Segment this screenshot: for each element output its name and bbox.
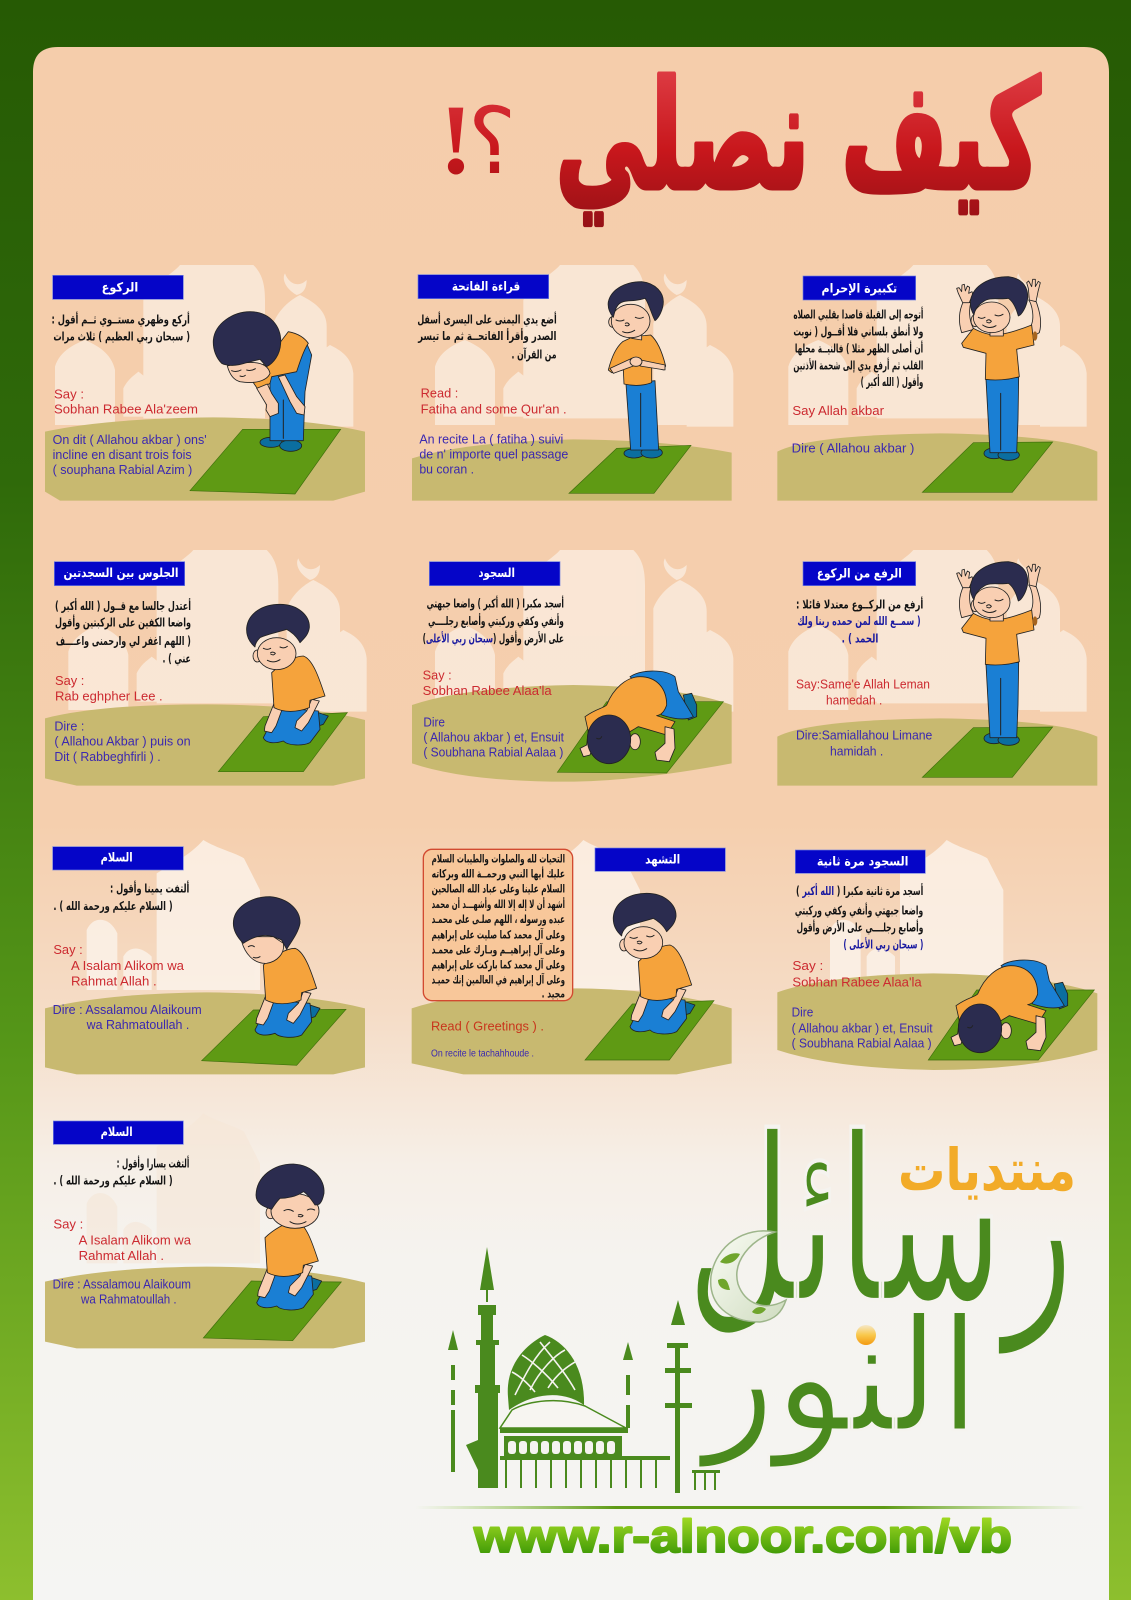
arabic text: ( سبحان ربي الأعلى ): [843, 936, 923, 951]
french instruction: Dire ( Allahou akbar ): [792, 441, 914, 455]
arabic text: واضعا جبهتي وأنفي وكفي وركبتي: [795, 902, 923, 918]
prayer rug: [557, 702, 723, 773]
callout: tashahhud text: عبده ورسوله ، اللهم صلـى على محمـد: [432, 912, 565, 926]
heading: [418, 275, 549, 299]
arabic text: ألتفت يسارا وأقول :: [117, 1155, 189, 1171]
heading: السجود: [478, 565, 515, 580]
heading: السلام: [101, 1124, 133, 1140]
french instruction: wa Rahmatoullah .: [80, 1292, 177, 1306]
background domes: [87, 1113, 260, 1263]
boy: sitting: [247, 604, 328, 745]
english instruction: Rahmat Allah .: [71, 975, 157, 989]
callout: tashahhud text: مجيد .: [542, 986, 565, 1000]
french instruction: [53, 433, 207, 477]
panel: second sujood: [777, 840, 1097, 1070]
heading: [803, 276, 916, 300]
english instruction: Sobhan Rabee Alaa'la: [423, 684, 553, 698]
logo wordmark: [686, 1089, 1076, 1468]
heading: السجود مرة ثانية: [817, 853, 908, 868]
english instruction: Read :: [421, 386, 458, 400]
arabic text: أسجد مكبرا ( الله أكبر ) واضعا جبهتي: [427, 596, 564, 612]
arabic text: على الأرض وأقول (سبحان ربي الأعلى): [423, 630, 564, 646]
background domes: [788, 265, 1087, 427]
arabic text: ( السلام عليكم ورحمة الله ) .: [53, 899, 173, 914]
french instruction: Dire: [423, 716, 445, 730]
heading: الجلوس بين السجدتين: [63, 565, 178, 580]
boy: prostrating: [580, 671, 697, 764]
french instruction: [53, 1277, 191, 1306]
english instruction: [55, 674, 163, 704]
heading: الرفع من الركوع: [817, 566, 902, 581]
callout: tashahhud text: وعلى آل إبراهيــم وبـارك على محمـد: [432, 942, 565, 956]
background domes: [467, 840, 640, 990]
prayer rug: [202, 1009, 346, 1065]
french instruction: Dire : Assalamou Alaikoum: [53, 1003, 202, 1017]
french instruction: [796, 728, 932, 758]
french instruction: Dire : Assalamou Alaikoum: [53, 1277, 191, 1291]
french instruction: On dit ( Allahou akbar ) ons': [53, 433, 207, 447]
french instruction: [419, 432, 568, 476]
english instruction: Sobhan Rabee Ala'zeem: [54, 403, 198, 417]
arabic text: [795, 883, 923, 951]
callout: tashahhud text: أشهد أن لا إله إلا الله وأشهـــد أن محمد: [432, 897, 565, 911]
prayer rug: [585, 1001, 714, 1060]
heading: [53, 1121, 183, 1144]
prayer rug: [190, 429, 341, 494]
arabic text: ( السلام عليكم ورحمة الله ) .: [53, 1174, 173, 1189]
background domes: [788, 550, 1087, 712]
french instruction: ( Allahou Akbar ) puis on: [54, 735, 191, 749]
arabic text: ( سمــع الله لمن حمده ربنا ولك: [797, 614, 921, 629]
icon: mosque: [448, 1247, 720, 1493]
ground: [412, 685, 732, 782]
english instruction: A Isalam Alikom wa: [71, 959, 185, 973]
icon: orange dot: [856, 1325, 876, 1345]
ground: [777, 718, 1097, 786]
arabic text: أضع يدي اليمنى على اليسرى أسفل: [417, 311, 557, 326]
website url: www.r-alnoor.com/vb: [473, 1510, 1012, 1562]
heading: [54, 562, 185, 586]
callout: tashahhud text: وعلى آل محمد كما صليت على إبراهيم: [432, 927, 565, 941]
arabic text: ألتفت يمينا وأقول :: [110, 881, 189, 897]
panel: sujood: [412, 550, 733, 782]
heading: قراءة الفاتحة: [452, 279, 520, 294]
french instruction: Dire: [792, 1006, 813, 1020]
french instruction: hamidah .: [830, 744, 883, 758]
logo wordmark: النور: [698, 1286, 980, 1468]
prayer rug: [218, 713, 347, 772]
arabic text: [417, 311, 557, 361]
arabic text: أركع وظهري مستــوي ثــم أقول :: [51, 311, 190, 327]
arabic text: [793, 306, 923, 390]
ground: [45, 704, 365, 786]
boy: sitting, head turned: [233, 897, 320, 1037]
english instruction: Say :: [54, 387, 84, 401]
english instruction: hamedah .: [826, 693, 882, 707]
french instruction: wa Rahmatoullah .: [86, 1018, 189, 1032]
heading: [595, 848, 725, 871]
french instruction: [792, 1006, 933, 1051]
arabic text: [53, 1155, 189, 1189]
french instruction: [54, 720, 191, 764]
french instruction: Dire:Samiallahou Limane: [796, 728, 932, 742]
background domes: [55, 265, 353, 427]
arabic text: [796, 596, 923, 645]
ground: [777, 973, 1097, 1070]
heading: [53, 847, 183, 870]
english instruction: Sobhan Rabee Alaa'la: [792, 976, 923, 990]
english instruction: Say:Same'e Allah Leman: [796, 677, 930, 691]
heading: التشهد: [645, 851, 680, 866]
english instruction: Read ( Greetings ) .: [431, 1020, 544, 1034]
logo wordmark: منتديات: [898, 1136, 1076, 1204]
arabic text: الحمد ) .: [842, 631, 878, 645]
ground: [45, 992, 365, 1074]
prayer rug: [203, 1281, 341, 1341]
french instruction: ( Allahou akbar ) et, Ensuit: [423, 731, 564, 745]
french instruction: bu coran .: [419, 462, 474, 476]
english instruction: [53, 943, 185, 989]
french instruction: ( souphana Rabial Azim ): [53, 463, 192, 477]
arabic text: أعتدل جالسا مع قــول ( الله أكبر ): [55, 598, 191, 614]
ground: [45, 417, 365, 501]
arabic text: ( اللهم اغفر لي وارحمنى واعــــف: [56, 634, 191, 649]
boy: hands on chest: [608, 282, 666, 458]
arabic text: وأقول ( الله أكبر ): [861, 374, 923, 390]
boy: hands raised: [957, 562, 1041, 745]
ground: [412, 439, 732, 501]
english instruction: Rahmat Allah .: [79, 1249, 164, 1263]
english instruction: [796, 677, 930, 707]
panel: salam right: [45, 840, 365, 1074]
arabic text: [423, 596, 564, 646]
prayer rug: [928, 990, 1094, 1060]
boy: sitting, facing front: [256, 1164, 324, 1310]
background domes: [830, 840, 1003, 990]
arabic text: أن أصلى الظهر مثلا ) فالنيــة محلها: [795, 340, 923, 355]
french instruction: ( Soubhana Rabial Aalaa ): [792, 1037, 932, 1051]
panel: salam left: [45, 1113, 365, 1348]
heading: تكبيرة الإحرام: [821, 280, 897, 296]
callout: tashahhud text: عليك أيها النبي ورحمــة الله وبركاته: [432, 866, 565, 880]
french instruction: Dit ( Rabbeghfirli ) .: [54, 750, 161, 764]
divider line: [415, 1506, 1085, 1509]
ground: [412, 988, 732, 1074]
arabic text: ولا أنطق بلساني فلا أقــول ( نويت: [793, 324, 923, 340]
arabic text: القلب ثم أرفع يدي إلى شحمة الأذنين: [793, 357, 923, 372]
prayer rug: [922, 727, 1053, 777]
french instruction: ( Allahou akbar ) et, Ensuit: [792, 1021, 933, 1035]
arabic text: الصدر وأقرأ الفاتحــة ثم ما تيسر: [417, 328, 556, 344]
heading: [53, 275, 183, 299]
arabic text: وأصابع رجلــــي على الأرض وأقول: [797, 920, 923, 936]
background domes: [68, 550, 367, 712]
english instruction: [423, 668, 553, 698]
arabic text: [51, 311, 190, 344]
arabic text: واضعا الكفين على الركبتين وأقول: [55, 615, 191, 631]
background domes: [87, 840, 260, 990]
callout: tashahhud text: السلام علينا وعلى عباد الله الصالحين: [432, 881, 565, 895]
title: !: [439, 84, 473, 195]
prayer rug: [922, 442, 1053, 492]
english instruction: [792, 959, 923, 990]
arabic text: ( سبحان ربي العظيم ) ثلاث مرات: [53, 330, 190, 344]
arabic text: من القرآن .: [511, 346, 556, 361]
boy: prostrating: [951, 960, 1068, 1053]
title: ؟: [468, 88, 516, 195]
panel: sitting between prostrations: [45, 550, 367, 786]
background domes: [435, 265, 733, 427]
english instruction: Say :: [53, 943, 83, 957]
french instruction: Dire :: [54, 720, 84, 734]
english instruction: Say Allah akbar: [792, 404, 884, 418]
french instruction: On recite le tachahhoude .: [431, 1049, 534, 1060]
english instruction: Fatiha and some Qur'an .: [421, 402, 567, 416]
panel: tashahhud: [412, 840, 732, 1074]
boy: hands raised: [957, 277, 1041, 460]
heading: [803, 562, 916, 586]
english instruction: Say :: [792, 959, 823, 973]
heading: السلام: [101, 850, 133, 866]
french instruction: de n' importe quel passage: [419, 447, 568, 461]
french instruction: incline en disant trois fois: [53, 448, 192, 462]
arabic text: أسجد مرة ثانية مكبرا ( الله أكبر ): [796, 883, 923, 898]
english instruction: A Isalam Alikom wa: [79, 1233, 192, 1247]
callout: tashahhud text: التحيات لله والصلوات والطيبات السلام: [432, 851, 565, 865]
english instruction: [53, 1217, 192, 1263]
english instruction: Say :: [423, 668, 452, 682]
ground: [45, 1267, 365, 1348]
french instruction: ( Soubhana Rabial Aalaa ): [423, 746, 563, 760]
arabic text: [55, 598, 191, 665]
arabic text: [53, 881, 189, 914]
prayer rug: [569, 445, 691, 493]
english instruction: [54, 387, 198, 417]
english instruction: Say :: [55, 674, 84, 688]
english instruction: [421, 386, 567, 416]
heading: [429, 562, 560, 586]
arabic text: عني ) .: [162, 651, 191, 665]
callout: tashahhud text: [423, 849, 573, 1001]
background domes: [435, 550, 733, 712]
boy: sitting: [613, 893, 695, 1034]
french instruction: [53, 1003, 202, 1032]
heading: [795, 850, 925, 873]
panel: rising from ruku: [777, 550, 1097, 786]
ground: [777, 433, 1097, 501]
boy: bowing: [213, 312, 312, 451]
english instruction: Rab eghpher Lee .: [55, 690, 163, 704]
callout: tashahhud text: وعلى آل إبراهيم في العالمين إنك حميـد: [432, 972, 565, 986]
arabic text: أتوجه إلى القبلة قاصدا بقلبي الصلاه: [793, 306, 923, 322]
heading: الركوع: [102, 279, 138, 294]
french instruction: [423, 716, 564, 760]
callout: tashahhud text: وعلى آل محمد كما باركت على إبراهيم: [432, 957, 565, 971]
english instruction: Say :: [53, 1217, 83, 1231]
arabic text: أرفع من الركــوع معتدلا قائلا :: [796, 596, 923, 612]
panel: takbir: [777, 265, 1097, 501]
arabic text: وأنفي وكفي وركبتي وأصابع رجلــــي: [428, 613, 564, 629]
french instruction: An recite La ( fatiha ) suivi: [419, 432, 563, 446]
panel: fatiha: [412, 265, 733, 501]
icon: crescent moon: [711, 1231, 786, 1322]
panel: ruku: [45, 265, 365, 501]
